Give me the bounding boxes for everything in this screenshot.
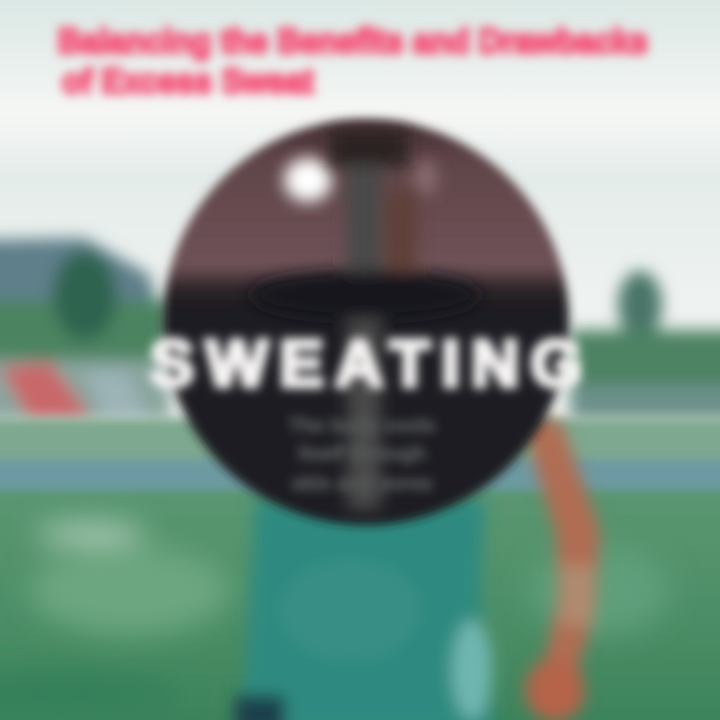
title: pink heading: Balancing the Benefits and Drawbacks (58, 22, 648, 61)
icon: white symbol at top of circle (284, 158, 437, 202)
text block: lower circle text lines: itself through (298, 443, 426, 465)
person: blurred runner (235, 420, 600, 720)
panel: dark circular overlay (163, 119, 569, 525)
heading: word in band across circle: SWEATING (150, 326, 582, 400)
text block: lower circle text lines: The body cools (289, 415, 435, 437)
text block: lower circle text lines (289, 415, 435, 495)
text block: lower circle text lines: skin and pores (291, 473, 433, 495)
title: pink heading (58, 22, 648, 101)
title: pink heading: of Excess Sweat (62, 62, 314, 101)
figure: vertical dark band in circle (250, 130, 480, 510)
